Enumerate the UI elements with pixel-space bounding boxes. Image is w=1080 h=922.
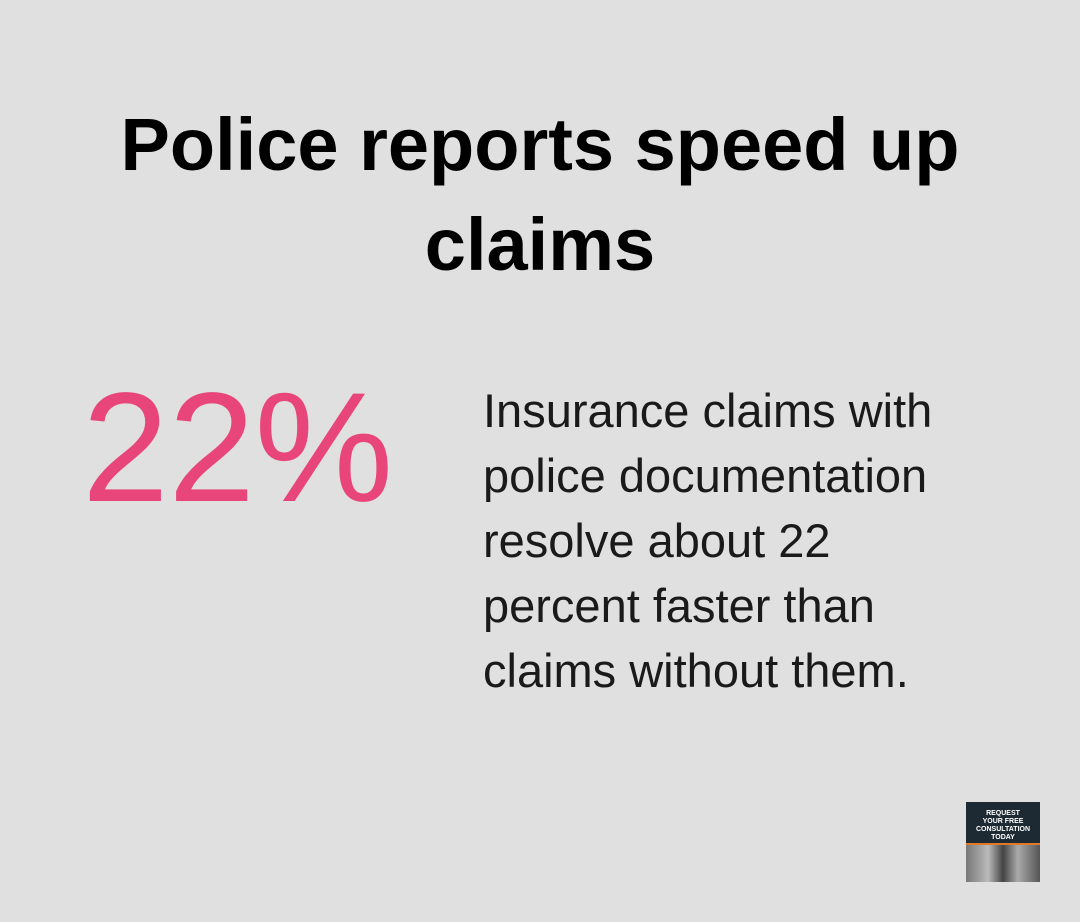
description text: police documentation <box>483 449 927 502</box>
title <box>121 103 959 286</box>
logo: consultation badge: CONSULTATION <box>976 826 1030 833</box>
description text: Insurance claims with <box>483 384 932 437</box>
logo: consultation badge: TODAY <box>991 834 1015 841</box>
logo: consultation badge: REQUEST <box>986 810 1020 817</box>
big statistic: 22% <box>82 361 393 535</box>
logo: consultation badge <box>966 802 1040 882</box>
description text: resolve about 22 <box>483 514 831 567</box>
logo: consultation badge: YOUR FREE <box>983 818 1023 825</box>
description text: claims without them. <box>483 644 909 697</box>
description text: percent faster than <box>483 579 875 632</box>
title: claims <box>425 203 655 286</box>
description text <box>483 384 932 697</box>
title: Police reports speed up <box>121 103 959 186</box>
